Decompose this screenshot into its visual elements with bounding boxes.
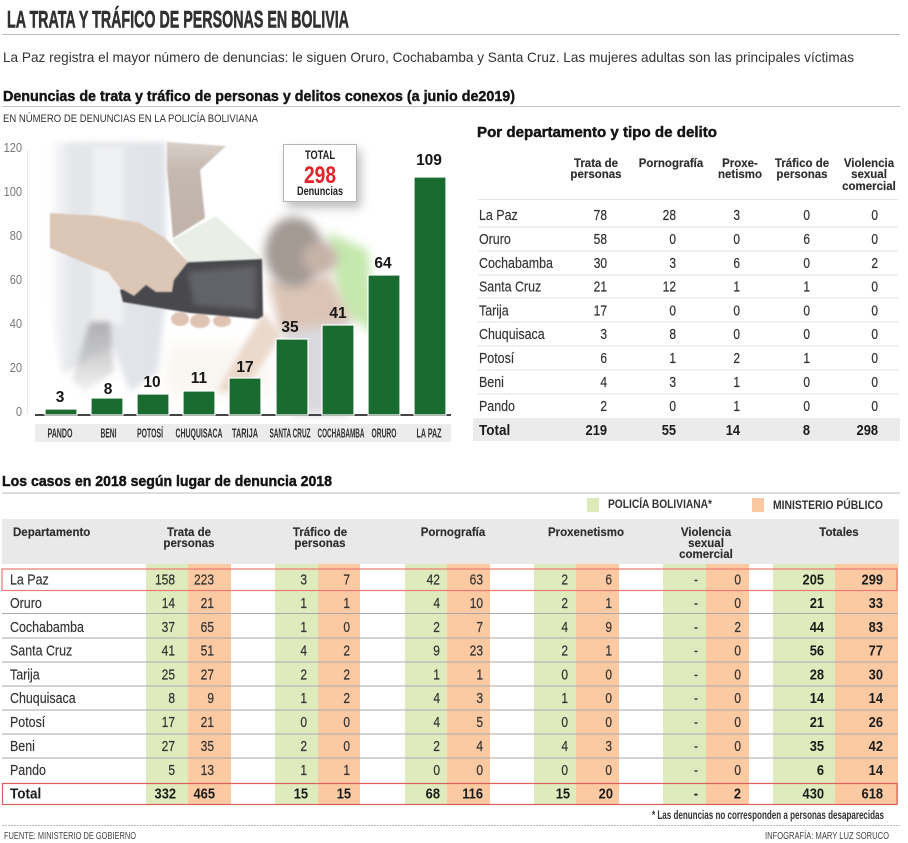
row: Pando: 1 xyxy=(343,762,350,778)
chart: bar values: 11 xyxy=(191,370,208,387)
row: Pando: 1 xyxy=(300,762,307,778)
table header: Trata de xyxy=(574,158,618,170)
row: Total: 20 xyxy=(599,785,613,802)
row: Chuquisaca xyxy=(479,326,878,342)
row: La Paz: 78 xyxy=(594,207,607,223)
row: La Paz: 7 xyxy=(343,571,350,588)
row: Oruro: 0 xyxy=(871,231,878,247)
table header: Tráfico de xyxy=(775,158,829,170)
row: La Paz xyxy=(479,207,878,223)
row: Pando: 0 xyxy=(605,762,612,778)
row: La Paz: - xyxy=(694,571,698,588)
green columns: policía boliviana xyxy=(146,564,835,804)
row: Tarija: 0 xyxy=(605,666,612,683)
row: Chuquisaca: 8 xyxy=(168,690,175,706)
table header band: Tráfico de xyxy=(293,527,347,539)
chart: bar values: 8 xyxy=(104,381,113,398)
row: Santa Cruz: 23 xyxy=(470,642,483,659)
row: Santa Cruz: 56 xyxy=(810,642,824,659)
row: Pando: 14 xyxy=(869,761,883,778)
panel: casos 2018 table xyxy=(2,519,899,804)
row: Beni: 1 xyxy=(733,374,740,390)
chart: bar values: 17 xyxy=(236,359,254,376)
row: La Paz: 3 xyxy=(733,207,740,223)
row: Chuquisaca: 2 xyxy=(343,690,350,706)
row: Tarija: 0 xyxy=(561,666,568,683)
table header band: Violencia xyxy=(681,527,732,539)
row: Santa Cruz: Santa Cruz xyxy=(479,278,541,295)
row: Cochabamba: 2 xyxy=(871,255,878,271)
row: Santa Cruz: 41 xyxy=(162,642,175,659)
table header xyxy=(570,158,896,193)
row: La Paz: La Paz xyxy=(479,207,518,223)
table header band: Proxenetismo xyxy=(548,527,624,539)
row: Total: 15 xyxy=(337,785,351,802)
row: Chuquisaca: Chuquisaca xyxy=(10,690,76,706)
row: Tarija: Tarija xyxy=(479,302,509,319)
heading: los casos en 2018: Los casos en 2018 según lugar de denuncia 2018 xyxy=(2,473,332,490)
row: Chuquisaca: 0 xyxy=(871,326,878,342)
row: La Paz: 63 xyxy=(470,571,483,588)
row: Cochabamba: 65 xyxy=(201,619,214,635)
row: Oruro xyxy=(479,231,878,247)
row: Cochabamba: Cochabamba xyxy=(479,255,553,271)
row: Tarija: 2 xyxy=(300,666,307,683)
chart: y axis: 20 xyxy=(10,360,22,375)
chart: y axis: 60 xyxy=(10,272,22,287)
row: Oruro: 10 xyxy=(470,595,483,611)
row: Pando: 0 xyxy=(734,762,741,778)
table header: Proxe- xyxy=(722,158,758,170)
row: Total: 430 xyxy=(803,785,824,802)
row: Santa Cruz: 12 xyxy=(663,278,676,295)
row: Santa Cruz xyxy=(479,278,878,295)
row: Potosí: 0 xyxy=(605,714,612,730)
row: Pando: 0 xyxy=(871,398,878,414)
row: Pando: 0 xyxy=(561,762,568,778)
table header: Pornografía xyxy=(639,158,704,170)
table header band xyxy=(2,519,899,564)
row: Oruro: 1 xyxy=(300,595,307,611)
row: La Paz: 42 xyxy=(427,571,440,588)
row: Potosí: 4 xyxy=(433,714,440,730)
row: Santa Cruz: Santa Cruz xyxy=(10,642,72,659)
row: La Paz: 28 xyxy=(663,207,676,223)
row: Chuquisaca: 1 xyxy=(561,690,568,706)
row: Chuquisaca: 3 xyxy=(476,690,483,706)
table header band: Departamento xyxy=(13,527,90,539)
row: Oruro: 14 xyxy=(162,595,175,611)
row: Beni xyxy=(479,374,878,390)
row: Total: 14 xyxy=(726,421,740,438)
row: Santa Cruz: 1 xyxy=(733,278,740,295)
row: Chuquisaca: - xyxy=(694,690,698,706)
chart: department labels: LA PAZ xyxy=(416,426,442,440)
row: Beni: 4 xyxy=(600,374,607,390)
table header: personas xyxy=(570,169,622,181)
row: Total: 15 xyxy=(556,785,570,802)
row: Chuquisaca: 0 xyxy=(605,690,612,706)
chart: bar values: 3 xyxy=(56,389,65,406)
row: Potosí: - xyxy=(694,714,698,730)
row: Chuquisaca: 0 xyxy=(803,326,810,342)
row: Beni: 3 xyxy=(605,738,612,754)
table header: comercial xyxy=(842,181,896,193)
row: Total: 465 xyxy=(194,785,215,802)
row: Pando: 5 xyxy=(168,762,175,778)
row: Santa Cruz: 9 xyxy=(433,642,440,659)
row: Chuquisaca: 1 xyxy=(300,690,307,706)
row: Pando: 0 xyxy=(476,762,483,778)
row: Total: Total xyxy=(10,786,41,803)
table header band: personas xyxy=(294,538,346,550)
row: Pando: Pando xyxy=(10,762,46,778)
row: Potosí: 21 xyxy=(201,714,214,730)
row: Tarija xyxy=(10,666,883,683)
row: Beni: 35 xyxy=(810,737,824,754)
row: Tarija: 0 xyxy=(734,666,741,683)
row: La Paz: 0 xyxy=(871,207,878,223)
chart unit note: EN NÚMERO DE DENUNCIAS EN LA POLICÍA BOLIVIANA xyxy=(3,112,259,125)
row: Tarija: 1 xyxy=(476,666,483,683)
row: Tarija: - xyxy=(694,666,698,683)
row: Chuquisaca: 3 xyxy=(600,326,607,342)
row: La Paz: 205 xyxy=(803,571,824,588)
highlight: Total row xyxy=(2,784,897,804)
row: Total: Total xyxy=(479,422,510,439)
chart: bar values: 64 xyxy=(374,255,392,272)
row: Beni: - xyxy=(694,738,698,754)
row: Beni: 27 xyxy=(162,738,175,754)
row: Chuquisaca: 8 xyxy=(669,326,676,342)
row: Cochabamba: 44 xyxy=(810,618,824,635)
title: LA TRATA Y TRÁFICO DE PERSONAS EN BOLIVIA xyxy=(7,6,349,34)
row: Oruro: 0 xyxy=(734,595,741,611)
heading: denuncias: Denuncias de trata y tráfico de personas y delitos conexos (a junio de2019) xyxy=(3,88,515,105)
callout: total: Denuncias xyxy=(297,184,343,198)
legend xyxy=(587,496,883,512)
row: Cochabamba xyxy=(479,255,878,271)
row: Tarija: 0 xyxy=(733,302,740,319)
row: Beni: 0 xyxy=(734,738,741,754)
row: La Paz: 2 xyxy=(561,571,568,588)
legend: MINISTERIO PÚBLICO xyxy=(773,497,883,512)
row: Pando: - xyxy=(694,762,698,778)
row: Total xyxy=(473,418,900,441)
row: Oruro: 2 xyxy=(561,595,568,611)
callout: total: 298 xyxy=(304,162,336,189)
row: Cochabamba: 0 xyxy=(343,619,350,635)
row: Cochabamba: 3 xyxy=(669,255,676,271)
chart: y axis: 80 xyxy=(10,228,22,243)
row: Beni: 35 xyxy=(201,738,214,754)
row: Santa Cruz: 1 xyxy=(605,642,612,659)
chart: department labels: COCHABAMBA xyxy=(318,426,365,440)
row: Oruro: 33 xyxy=(869,594,883,611)
row: Potosí: 21 xyxy=(810,713,824,730)
row: Total: 68 xyxy=(426,785,440,802)
row: Chuquisaca: 4 xyxy=(433,690,440,706)
row: Potosí: 0 xyxy=(300,714,307,730)
row: Oruro: 1 xyxy=(605,595,612,611)
row: Tarija: 0 xyxy=(871,302,878,319)
row: Pando xyxy=(479,398,878,414)
row: Oruro: 0 xyxy=(733,231,740,247)
row: Chuquisaca: Chuquisaca xyxy=(479,326,545,342)
photo: hand with wallet and child xyxy=(48,142,376,414)
chart: bar values: 10 xyxy=(143,374,161,391)
table header band: Trata de xyxy=(167,527,211,539)
row: Beni: 2 xyxy=(300,738,307,754)
chart: y axis: 0 xyxy=(16,404,22,419)
table header band: Totales xyxy=(819,527,859,539)
row: Total: 55 xyxy=(662,421,676,438)
chart: department labels: BENI xyxy=(100,426,116,440)
row: Cochabamba: 2 xyxy=(734,619,741,635)
row: Oruro: 0 xyxy=(669,231,676,247)
row: Total: 116 xyxy=(462,785,483,802)
table header: personas xyxy=(776,169,828,181)
row: Potosí: 0 xyxy=(343,714,350,730)
row: Potosí: Potosí xyxy=(479,350,514,366)
row: Beni xyxy=(10,737,883,754)
chart: department labels: CHUQUISACA xyxy=(176,426,223,440)
row: Beni: 3 xyxy=(669,374,676,390)
row: Oruro: 4 xyxy=(433,595,440,611)
row: Cochabamba: 83 xyxy=(869,618,883,635)
row: Beni: 2 xyxy=(433,738,440,754)
row: Potosí: Potosí xyxy=(10,714,45,730)
row: Tarija: 0 xyxy=(803,302,810,319)
row: Pando: 1 xyxy=(733,398,740,414)
row: Cochabamba xyxy=(10,618,883,635)
row: Pando: 0 xyxy=(669,398,676,414)
row: Total: 298 xyxy=(857,421,878,438)
row: Oruro: Oruro xyxy=(10,595,42,611)
row: Total: 15 xyxy=(294,785,308,802)
chart: department labels: TARIJA xyxy=(232,426,258,440)
table header band: personas xyxy=(163,538,215,550)
row: Chuquisaca: 0 xyxy=(733,326,740,342)
subtitle: La Paz registra el mayor número de denuncias: le siguen Oruro, Cochabamba y Santa Cruz. Las mujeres adultas son las principales víctimas xyxy=(3,49,854,65)
row: Oruro: Oruro xyxy=(479,231,511,247)
chart: department labels: POTOSÍ xyxy=(137,426,163,440)
row: Potosí: 5 xyxy=(476,714,483,730)
row: Potosí: 1 xyxy=(669,350,676,366)
row: La Paz: 6 xyxy=(605,571,612,588)
row: La Paz: 3 xyxy=(300,571,307,588)
table header: Violencia xyxy=(844,158,895,170)
row: Cochabamba: 7 xyxy=(476,619,483,635)
row: Cochabamba: 0 xyxy=(803,255,810,271)
table header band: sexual xyxy=(688,538,724,550)
row: Beni: 0 xyxy=(803,374,810,390)
chart: bar values: 109 xyxy=(416,152,442,169)
row: Potosí: 0 xyxy=(561,714,568,730)
row: Beni: 42 xyxy=(869,737,883,754)
row: Oruro xyxy=(10,594,883,611)
chart: bar values: 41 xyxy=(329,305,347,322)
table header: netismo xyxy=(718,169,762,181)
chart: bar values: 35 xyxy=(281,319,299,336)
row: Beni: Beni xyxy=(479,374,504,390)
row: Santa Cruz: 1 xyxy=(803,278,810,295)
row: Cochabamba: - xyxy=(694,619,698,635)
chart: y axis: 120 xyxy=(4,140,22,155)
orange columns: ministerio público xyxy=(188,564,898,804)
row: Cochabamba: Cochabamba xyxy=(10,619,84,635)
row: Potosí: 2 xyxy=(733,350,740,366)
row: Tarija: Tarija xyxy=(10,666,40,683)
row: La Paz xyxy=(10,571,883,588)
row: Cochabamba: 2 xyxy=(433,619,440,635)
table header band: Pornografía xyxy=(421,527,486,539)
row: Beni: Beni xyxy=(10,738,35,754)
row: La Paz: 0 xyxy=(734,571,741,588)
chart: bars xyxy=(35,177,451,416)
row: Potosí: 6 xyxy=(600,350,607,366)
callout: total: TOTAL xyxy=(305,148,335,162)
row: La Paz: La Paz xyxy=(10,571,49,588)
row: Tarija: 2 xyxy=(343,666,350,683)
row: Total: 2 xyxy=(734,785,741,802)
row: Total: 618 xyxy=(862,785,883,802)
row: Pando xyxy=(10,761,883,778)
row: Potosí xyxy=(479,350,878,366)
row: Total: 8 xyxy=(803,421,810,438)
panel: por departamento y tipo de delito xyxy=(473,124,900,441)
row: Tarija: 25 xyxy=(162,666,175,683)
table header band: comercial xyxy=(679,549,733,561)
chart: bar values xyxy=(56,152,442,406)
row: Tarija: 30 xyxy=(869,666,883,683)
row: Cochabamba: 30 xyxy=(594,255,607,271)
row: Chuquisaca: 14 xyxy=(869,689,883,706)
row: Santa Cruz: 2 xyxy=(561,642,568,659)
row: Cochabamba: 6 xyxy=(733,255,740,271)
row: Santa Cruz: 0 xyxy=(734,642,741,659)
row: Oruro: 6 xyxy=(803,231,810,247)
row: La Paz: 299 xyxy=(862,571,883,588)
row: Total: 332 xyxy=(155,785,176,802)
chart: y axis xyxy=(4,140,27,419)
row: Chuquisaca: 0 xyxy=(734,690,741,706)
highlight: La Paz row xyxy=(2,569,897,590)
row: Santa Cruz: 21 xyxy=(594,278,607,295)
table header: sexual xyxy=(851,169,887,181)
row: Santa Cruz: 4 xyxy=(300,642,307,659)
row: Potosí: 1 xyxy=(803,350,810,366)
row: Cochabamba: 4 xyxy=(561,619,568,635)
row: Santa Cruz xyxy=(10,642,883,659)
row: Potosí: 17 xyxy=(162,714,175,730)
row: Santa Cruz: 2 xyxy=(343,642,350,659)
row: Santa Cruz: 51 xyxy=(201,642,214,659)
row: La Paz: 0 xyxy=(803,207,810,223)
row: Potosí: 26 xyxy=(869,713,883,730)
row: Pando: 13 xyxy=(201,762,214,778)
row: Total: - xyxy=(694,785,698,802)
row: Oruro: 1 xyxy=(343,595,350,611)
row: Chuquisaca xyxy=(10,689,883,706)
row: Chuquisaca: 14 xyxy=(810,689,824,706)
row: La Paz: 223 xyxy=(194,571,214,588)
heading: por departamento: Por departamento y tipo de delito xyxy=(477,124,717,141)
row: Oruro: 21 xyxy=(810,594,824,611)
row: Tarija: 1 xyxy=(433,666,440,683)
row: La Paz: 158 xyxy=(155,571,175,588)
row: Cochabamba: 9 xyxy=(605,619,612,635)
row: Tarija: 17 xyxy=(594,302,607,319)
row: Santa Cruz: - xyxy=(694,642,698,659)
row: Pando: 0 xyxy=(433,762,440,778)
row: Beni: 4 xyxy=(476,738,483,754)
row: Pando: Pando xyxy=(479,398,515,414)
chart: y axis: 100 xyxy=(4,184,22,199)
row: Pando: 6 xyxy=(817,761,824,778)
row: Beni: 0 xyxy=(871,374,878,390)
row: Tarija: 27 xyxy=(201,666,214,683)
chart: department labels xyxy=(35,424,451,442)
row: Pando: 2 xyxy=(600,398,607,414)
row: Total xyxy=(10,785,883,803)
row: Potosí: 0 xyxy=(871,350,878,366)
row: Tarija: 0 xyxy=(669,302,676,319)
chart: department labels: PANDO xyxy=(48,426,72,440)
source: FUENTE: MINISTERIO DE GOBIERNO xyxy=(4,831,136,842)
row: Pando: 0 xyxy=(803,398,810,414)
row: Beni: 0 xyxy=(343,738,350,754)
row: Tarija xyxy=(479,302,878,319)
row: Oruro: 58 xyxy=(594,231,607,247)
row: Oruro: - xyxy=(694,595,698,611)
row: Potosí xyxy=(10,713,883,730)
row: Santa Cruz: 0 xyxy=(871,278,878,295)
callout: total xyxy=(284,144,361,208)
row: Oruro: 21 xyxy=(201,595,214,611)
legend: POLICÍA BOLIVIANA* xyxy=(608,496,712,511)
row: Cochabamba: 1 xyxy=(300,619,307,635)
row: Cochabamba: 37 xyxy=(162,619,175,635)
chart: department labels: SANTA CRUZ xyxy=(270,426,311,440)
row: Chuquisaca: 9 xyxy=(207,690,214,706)
row: Potosí: 0 xyxy=(734,714,741,730)
chart: y axis: 40 xyxy=(10,316,22,331)
row: Total: 219 xyxy=(586,421,607,438)
row: Tarija: 28 xyxy=(810,666,824,683)
row: Santa Cruz: 77 xyxy=(869,642,883,659)
chart: department labels: ORURO xyxy=(372,426,396,440)
row: Beni: 4 xyxy=(561,738,568,754)
